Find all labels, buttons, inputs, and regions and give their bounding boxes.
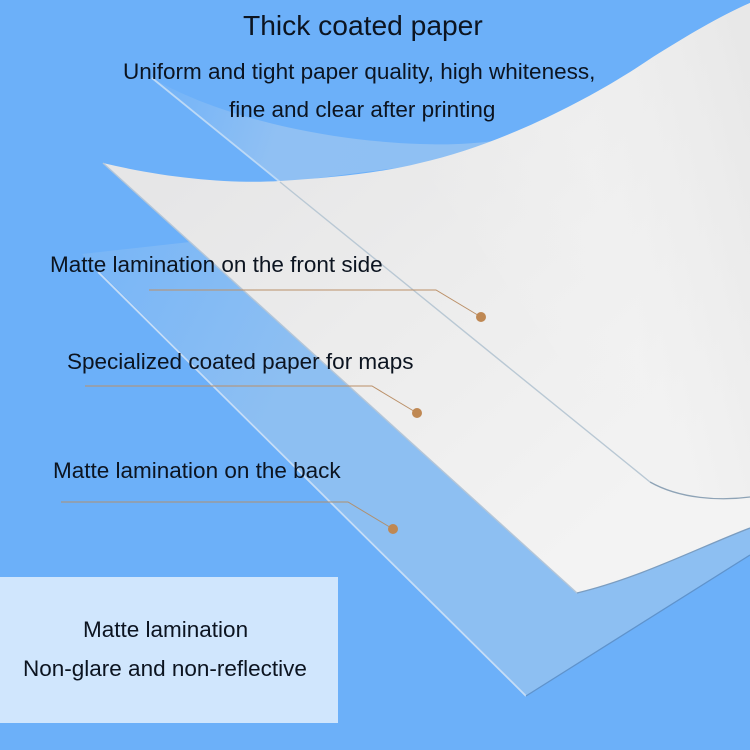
leader line 2: [85, 386, 422, 418]
callout panel background: [0, 577, 338, 723]
label: back lamination: Matte lamination on the back: [53, 458, 341, 483]
front lamination sheet top: [152, 78, 494, 183]
title: Thick coated paper: [243, 9, 483, 41]
label: front lamination: Matte lamination on the front side: [50, 252, 383, 277]
coated paper sheet: [103, 3, 750, 593]
back lamination sheet: [82, 242, 750, 696]
front lamination edge: [280, 182, 750, 499]
leader line 1: [149, 290, 486, 322]
callout text: Non-glare and non-reflective: [23, 656, 307, 681]
label: coated paper: Specialized coated paper for maps: [67, 349, 413, 374]
description line 2: fine and clear after printing: [229, 97, 495, 122]
description line 1: Uniform and tight paper quality, high whiteness,: [123, 59, 595, 84]
leader line 3: [61, 502, 398, 534]
callout heading: Matte lamination: [83, 617, 248, 642]
